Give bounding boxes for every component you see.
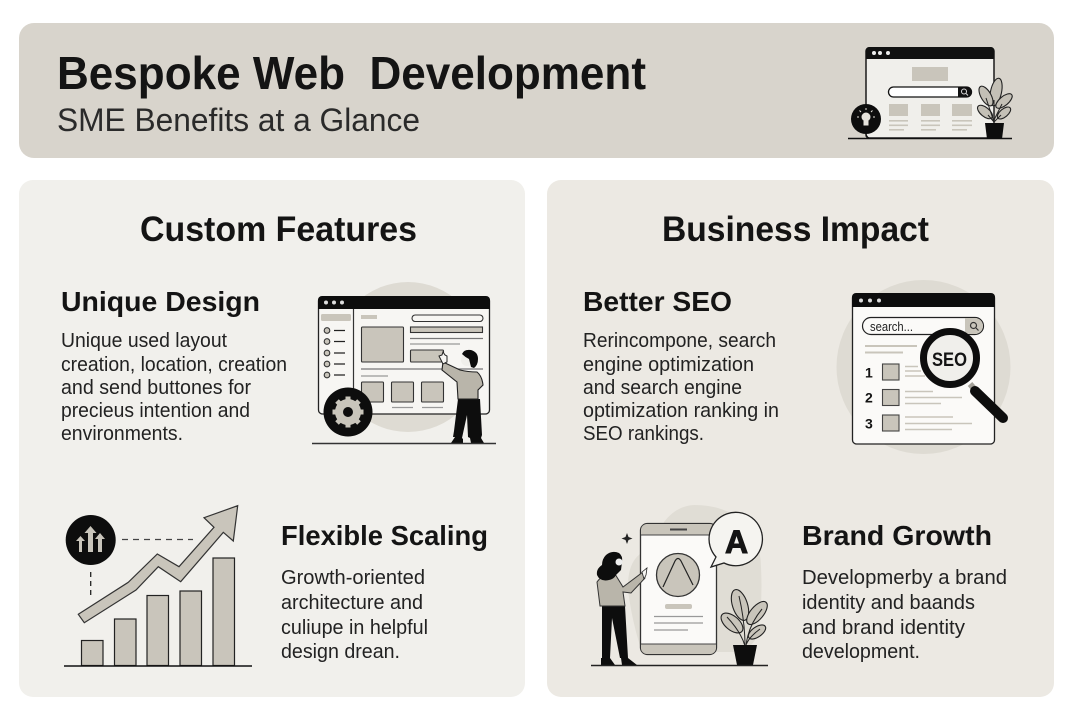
text: brand growth body: and brand identity bbox=[802, 617, 965, 639]
heading: unique design: Unique Design bbox=[61, 286, 260, 317]
title: Bespoke Web Development bbox=[57, 47, 646, 99]
text: unique design body: and send buttones for bbox=[61, 377, 251, 399]
icon: search results with seo magnifier bbox=[836, 280, 1010, 454]
heading: flexible scaling: Flexible Scaling bbox=[281, 520, 488, 551]
person pointing at screen bbox=[439, 350, 484, 443]
header banner bbox=[19, 23, 1054, 158]
text: brand growth body: development. bbox=[802, 641, 920, 663]
ranking numbers bbox=[865, 364, 873, 432]
ranking numbers: 3 bbox=[865, 416, 873, 432]
heading: better seo: Better SEO bbox=[583, 286, 732, 317]
text: better seo body bbox=[583, 330, 779, 445]
text: unique design body: precieus intention and bbox=[61, 400, 250, 422]
text: flexible scaling body: culiupe in helpful bbox=[281, 617, 428, 639]
text: unique design body bbox=[61, 330, 287, 445]
text: flexible scaling body: design drean. bbox=[281, 641, 400, 663]
text: brand growth body: Developmerby a brand bbox=[802, 567, 1007, 589]
text: better seo body: and search engine bbox=[583, 377, 742, 399]
icon: browser with search, bulb and plant bbox=[848, 47, 1015, 139]
subtitle: SME Benefits at a Glance bbox=[57, 102, 420, 138]
icon: phone with person, brand bubble and plant bbox=[591, 505, 771, 666]
text: brand growth body: identity and baands bbox=[802, 592, 975, 614]
text: flexible scaling body bbox=[281, 567, 428, 663]
heading: brand growth: Brand Growth bbox=[802, 520, 992, 551]
person pointing at phone bbox=[597, 552, 647, 665]
ranking numbers: 1 bbox=[865, 364, 873, 380]
icon: web layout with person and gear bbox=[312, 282, 496, 444]
icon: growth bar chart with arrow bbox=[64, 506, 252, 666]
label: seo: SEO bbox=[932, 350, 967, 371]
ranking numbers: 2 bbox=[865, 390, 873, 406]
text: unique design body: Unique used layout bbox=[61, 330, 227, 352]
text: flexible scaling body: Growth-oriented bbox=[281, 567, 425, 589]
text: unique design body: creation, location, creation bbox=[61, 354, 287, 376]
panel: custom features bbox=[19, 180, 525, 697]
text: brand growth body bbox=[802, 567, 1007, 663]
plant bbox=[718, 587, 771, 665]
heading: custom features: Custom Features bbox=[140, 210, 417, 249]
text: flexible scaling body: architecture and bbox=[281, 592, 423, 614]
text: better seo body: Rerincompone, search bbox=[583, 330, 776, 352]
heading: business impact: Business Impact bbox=[662, 210, 929, 249]
label: search placeholder: search... bbox=[870, 320, 913, 334]
text: unique design body: environments. bbox=[61, 423, 183, 445]
text: better seo body: engine optimization bbox=[583, 354, 754, 376]
panel: business impact bbox=[547, 180, 1054, 697]
text: better seo body: SEO rankings. bbox=[583, 423, 704, 445]
text: better seo body: optimization ranking in bbox=[583, 400, 779, 422]
label: brand letter: A bbox=[725, 524, 748, 560]
